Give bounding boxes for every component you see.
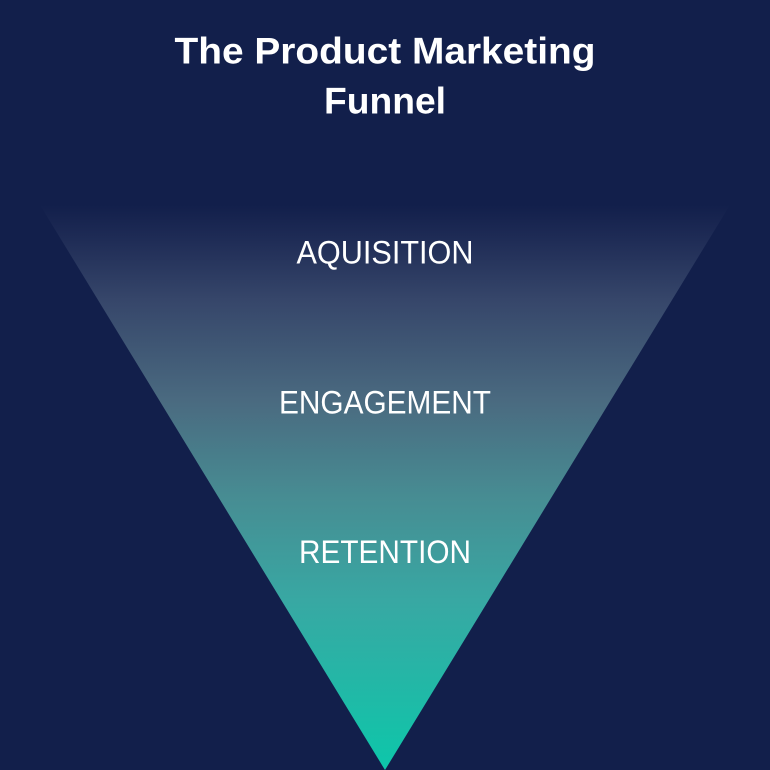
title: Funnel: [324, 80, 446, 122]
funnel triangle: [40, 205, 730, 770]
label: engagement stage: ENGAGEMENT: [279, 384, 491, 420]
title: The Product Marketing: [174, 30, 596, 72]
title: [174, 30, 596, 122]
label: retention stage: RETENTION: [299, 534, 471, 570]
label: acquisition stage: AQUISITION: [296, 234, 474, 270]
